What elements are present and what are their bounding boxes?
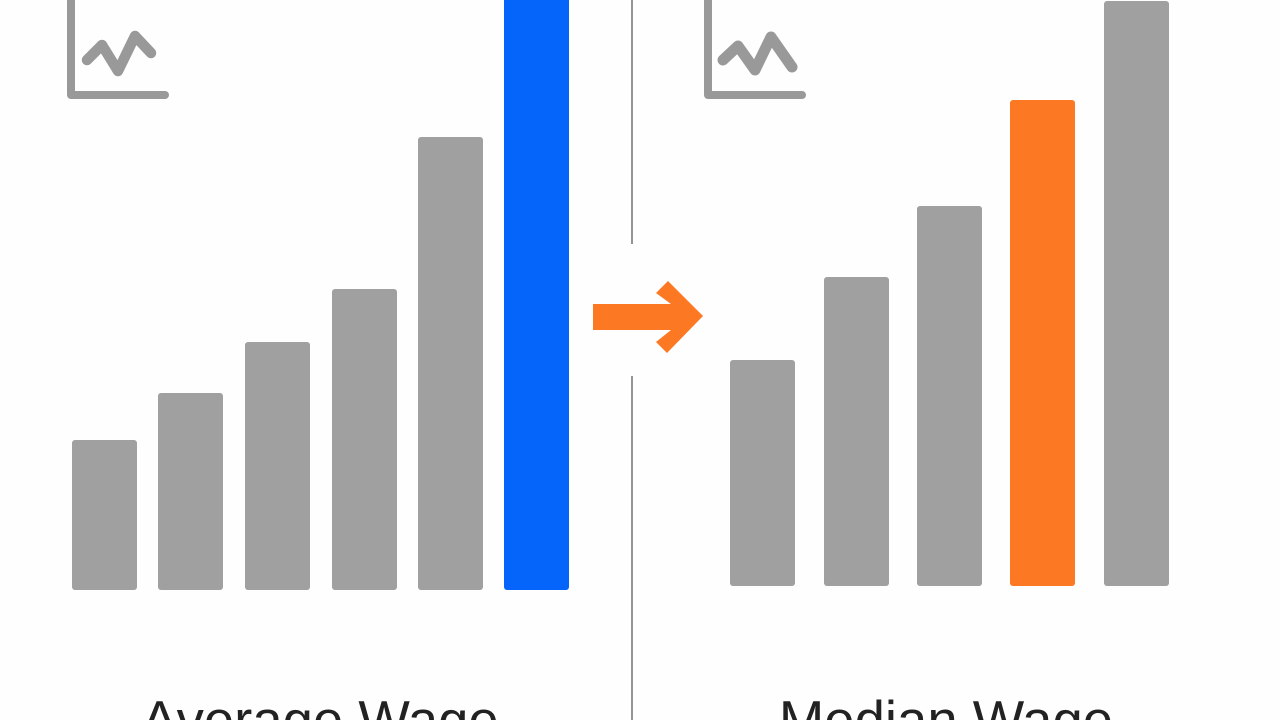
highlighted bar: median <box>1010 100 1075 586</box>
bar chart: average wage <box>72 0 569 590</box>
panel: median wage <box>708 0 1169 720</box>
panel: average wage <box>71 0 569 720</box>
center divider line <box>631 0 633 720</box>
highlighted bar: average <box>504 0 569 590</box>
icon: line chart (average) <box>71 0 165 95</box>
icon: line chart (median) <box>708 0 802 95</box>
bar chart: median wage <box>730 1 1169 586</box>
icon: orange arrow <box>593 281 703 353</box>
